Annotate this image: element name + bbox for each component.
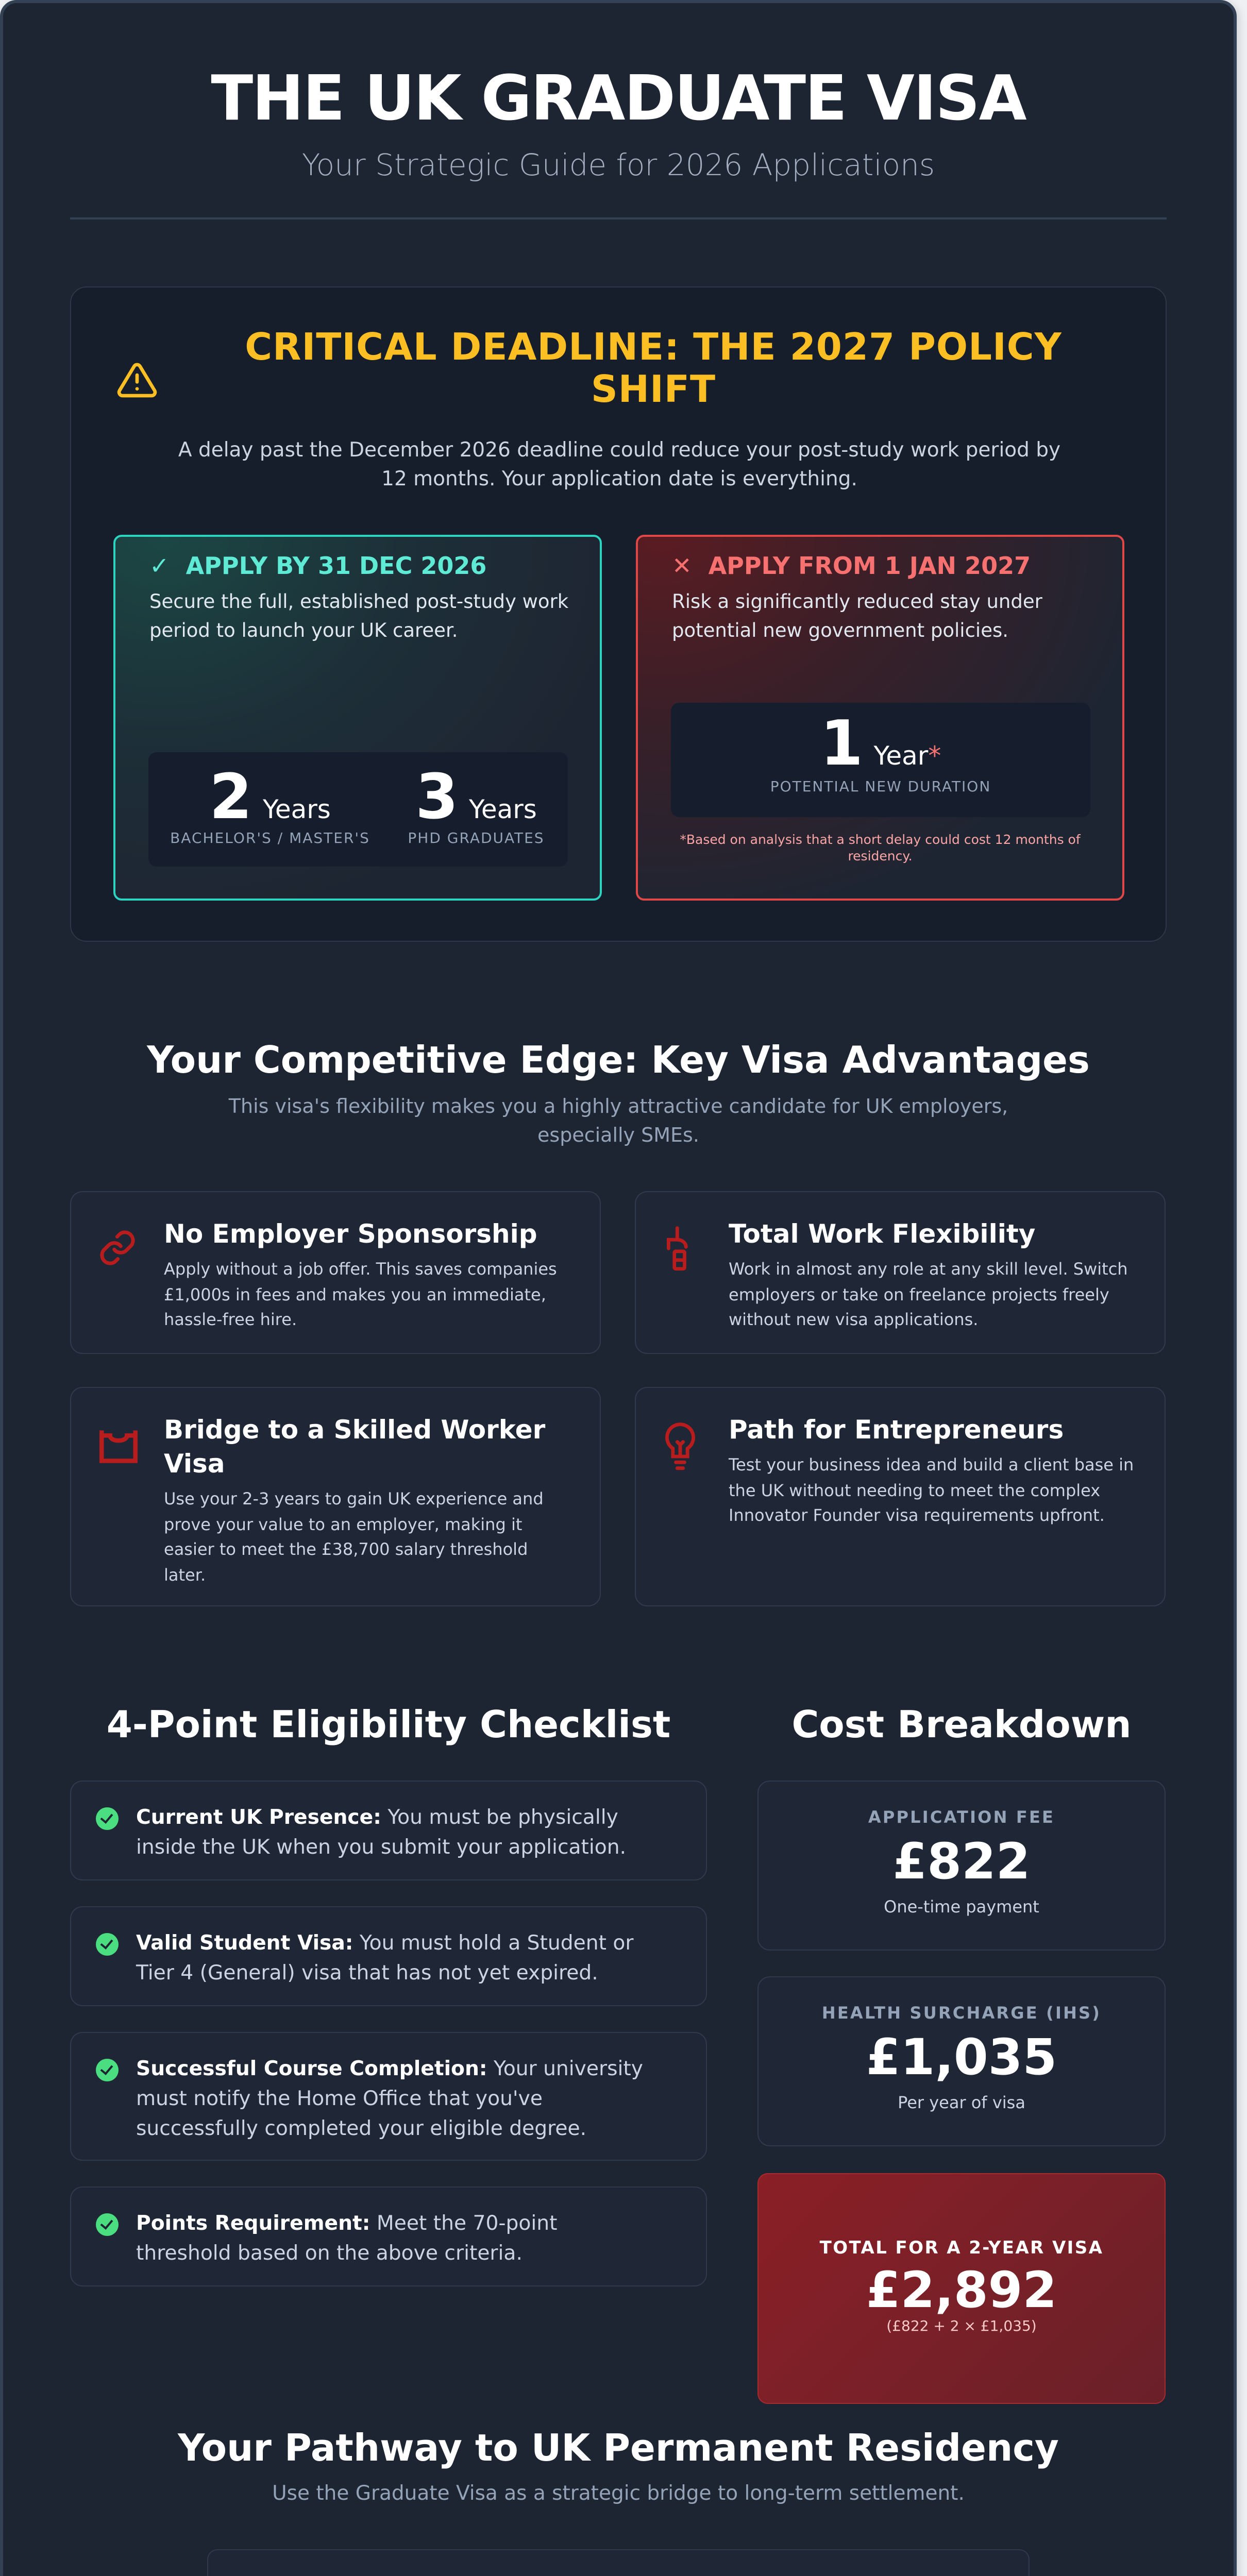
card: apply by 2026 [113, 535, 602, 901]
card: no employer sponsorship: No Employer Sponsorship [164, 1219, 537, 1249]
checklist item 4: Points Requirement: Meet the 70-point threshold based on the above criteria. [136, 2211, 557, 2265]
cost: application fee: One-time payment [884, 1897, 1039, 1917]
heading: checklist: 4-Point Eligibility Checklist [107, 1704, 670, 1747]
stat box [148, 752, 568, 867]
cost: total: (£822 + 2 × £1,035) [886, 2318, 1037, 2335]
stat box [671, 703, 1090, 817]
card: no employer sponsorship: Apply without a job offer. This saves companies £1,000s in fees and makes you an immediate, hassle-free hire. [164, 1259, 557, 1329]
stat box: PHD GRADUATES [408, 831, 545, 847]
stat box: 3 Years [415, 761, 537, 834]
cost: health surcharge: HEALTH SURCHARGE (IHS) [822, 2003, 1101, 2023]
icon: lightbulb [665, 1422, 695, 1470]
subtitle: pathway: Use the Graduate Visa as a strategic bridge to long-term settlement. [272, 2481, 965, 2505]
cost: application fee [757, 1781, 1166, 1951]
stat box: BACHELOR'S / MASTER'S [170, 831, 370, 847]
icon: warning [117, 363, 157, 398]
card: bridge to skilled worker [70, 1387, 601, 1606]
cost: application fee: £822 [892, 1833, 1031, 1891]
card: entrepreneurs: Test your business idea and build a client base in the UK without needing to meet the complex Innovator Founder visa requirements upfront. [729, 1455, 1134, 1525]
cost: health surcharge: £1,035 [866, 2029, 1057, 2087]
card: entrepreneurs: Path for Entrepreneurs [729, 1415, 1064, 1445]
cost: application fee: APPLICATION FEE [868, 1807, 1055, 1827]
card: total work flexibility [635, 1191, 1166, 1354]
stat box: POTENTIAL NEW DURATION [770, 779, 991, 795]
panel: critical deadline [70, 286, 1167, 942]
card: apply from 2027: ✕ APPLY FROM 1 JAN 2027 [672, 553, 1031, 580]
cost: health surcharge [757, 1976, 1166, 2146]
heading: pathway: Your Pathway to UK Permanent Residency [178, 2428, 1059, 2470]
checklist item 2 [70, 1906, 707, 2006]
card: total work flexibility: Work in almost any role at any skill level. Switch employers or take on freelance projects freely without new visa applications. [729, 1259, 1128, 1329]
cost: total [757, 2173, 1166, 2404]
icon: bridge [99, 1430, 138, 1463]
heading: advantages: Your Competitive Edge: Key Visa Advantages [147, 1040, 1090, 1082]
card: no employer sponsorship [70, 1191, 601, 1354]
icon: tools [667, 1226, 688, 1270]
card: total work flexibility: Total Work Flexibility [729, 1219, 1035, 1249]
card: entrepreneurs [635, 1387, 1166, 1606]
footnote: *Based on analysis that a short delay could cost 12 months of residency. [680, 832, 1081, 863]
cost: health surcharge: Per year of visa [898, 2093, 1025, 2112]
checklist item 2: Valid Student Visa: You must hold a Student or Tier 4 (General) visa that has not yet expired. [136, 1931, 634, 1985]
card: bridge to skilled worker: Use your 2-3 years to gain UK experience and prove your value to an employer, making it easier to meet the £38,700 salary threshold later. [164, 1489, 544, 1584]
checklist item 3 [70, 2032, 707, 2161]
icon: link [100, 1230, 135, 1265]
text: Secure the full, established post-study work period to launch your UK career. [149, 591, 568, 642]
step 1 [207, 2549, 1030, 2576]
checklist item 4 [70, 2187, 707, 2286]
intro text: A delay past the December 2026 deadline could reduce your post-study work period by 12 months. Your application date is everything. [178, 438, 1060, 490]
heading: ✓ APPLY BY 31 DEC 2026 [149, 553, 486, 580]
cost: total: £2,892 [866, 2262, 1057, 2319]
stat box: 1 Year* [820, 708, 941, 780]
title: THE UK GRADUATE VISA [211, 63, 1026, 135]
card: bridge to skilled worker: Bridge to a Skilled Worker Visa [164, 1415, 545, 1479]
heading: critical deadline: CRITICAL DEADLINE: THE 2027 POLICY SHIFT [245, 327, 1062, 411]
card: apply from 2027: Risk a significantly reduced stay under potential new government policies. [672, 591, 1042, 642]
checklist item 1: Current UK Presence: You must be physically inside the UK when you submit your application. [136, 1805, 626, 1859]
cost: total: TOTAL FOR A 2-YEAR VISA [820, 2238, 1103, 2259]
subtitle: Your Strategic Guide for 2026 Applications [302, 147, 935, 182]
stat box: 2 Years [209, 761, 331, 834]
card: apply from 2027 [636, 535, 1124, 901]
checklist item 3: Successful Course Completion: Your university must notify the Home Office that you've successfully completed your eligible degree. [136, 2057, 643, 2140]
subtitle: advantages: This visa's flexibility makes you a highly attractive candidate for UK employers, especially SMEs. [229, 1095, 1008, 1147]
heading: cost: Cost Breakdown [791, 1704, 1132, 1747]
checklist item 1 [70, 1781, 707, 1880]
